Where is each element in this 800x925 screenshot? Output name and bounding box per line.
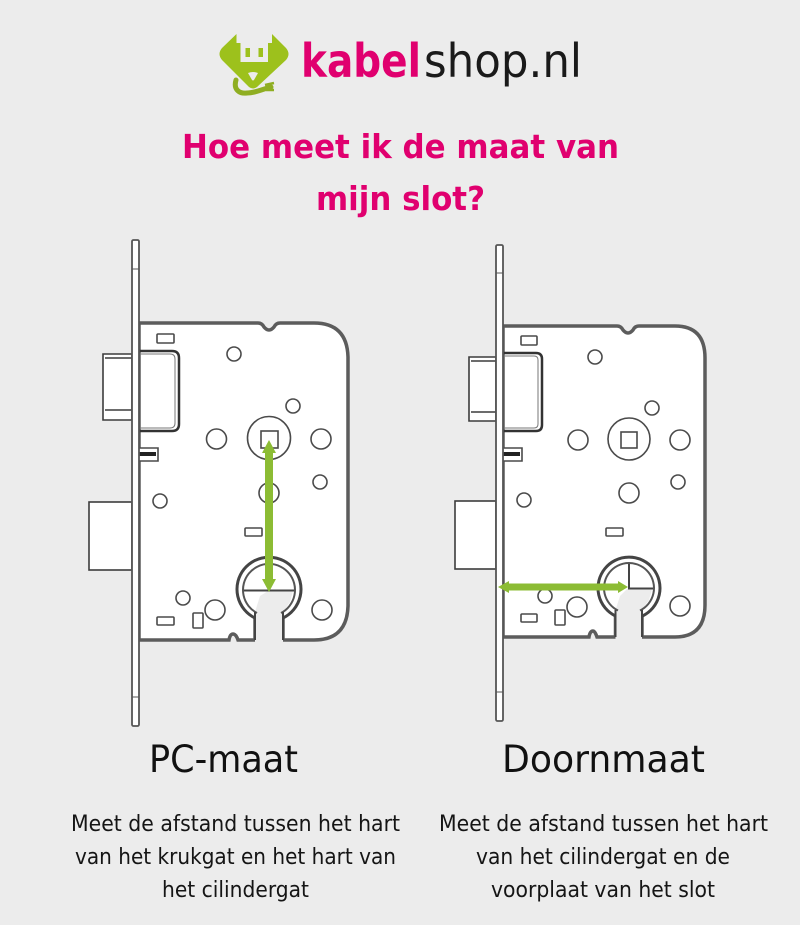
bolt bbox=[455, 501, 496, 569]
latch bbox=[103, 354, 132, 420]
text: PC-maat explanation: Meet de afstand tussen het hart bbox=[71, 812, 400, 837]
text: Doornmaat explanation: voorplaat van het slot bbox=[491, 878, 715, 903]
cylinder hole bbox=[237, 557, 301, 642]
logo wordmark: kabel bbox=[301, 34, 421, 88]
lock diagram: Doornmaat bbox=[455, 245, 705, 721]
title: mijn slot? bbox=[316, 179, 485, 218]
lock body bbox=[503, 326, 705, 637]
cylinder hole bbox=[598, 557, 660, 640]
title: Hoe meet ik de maat van bbox=[182, 127, 619, 166]
lock body bbox=[139, 323, 348, 640]
text: PC-maat explanation bbox=[71, 812, 400, 903]
holes bbox=[139, 334, 332, 628]
text: PC-maat explanation: het cilindergat bbox=[162, 878, 309, 903]
faceplate bbox=[496, 245, 503, 721]
heading: PC-maat: PC-maat bbox=[149, 738, 298, 781]
text: Doornmaat explanation: Meet de afstand tussen het hart bbox=[439, 812, 768, 837]
heading: Doornmaat: Doornmaat bbox=[502, 738, 705, 781]
bolt bbox=[89, 502, 132, 570]
text: Doornmaat explanation: van het cilindergat en de bbox=[476, 845, 730, 870]
handle hole bbox=[248, 416, 290, 460]
logo: kabelshop.nl bbox=[220, 34, 582, 93]
lock diagram: PC-maat bbox=[89, 240, 348, 726]
logo wordmark bbox=[301, 34, 582, 88]
latch bbox=[469, 357, 496, 421]
faceplate bbox=[132, 240, 139, 726]
text: PC-maat explanation: van het krukgat en het hart van bbox=[75, 845, 396, 870]
text: Doornmaat explanation bbox=[439, 812, 768, 903]
handle hole bbox=[608, 418, 650, 460]
holes bbox=[503, 336, 690, 625]
arrow: doorn distance bbox=[498, 581, 628, 593]
arrow: PC distance bbox=[262, 440, 276, 592]
title bbox=[182, 127, 619, 218]
logo wordmark: shop.nl bbox=[424, 34, 582, 88]
icon: green plug bbox=[220, 34, 288, 93]
